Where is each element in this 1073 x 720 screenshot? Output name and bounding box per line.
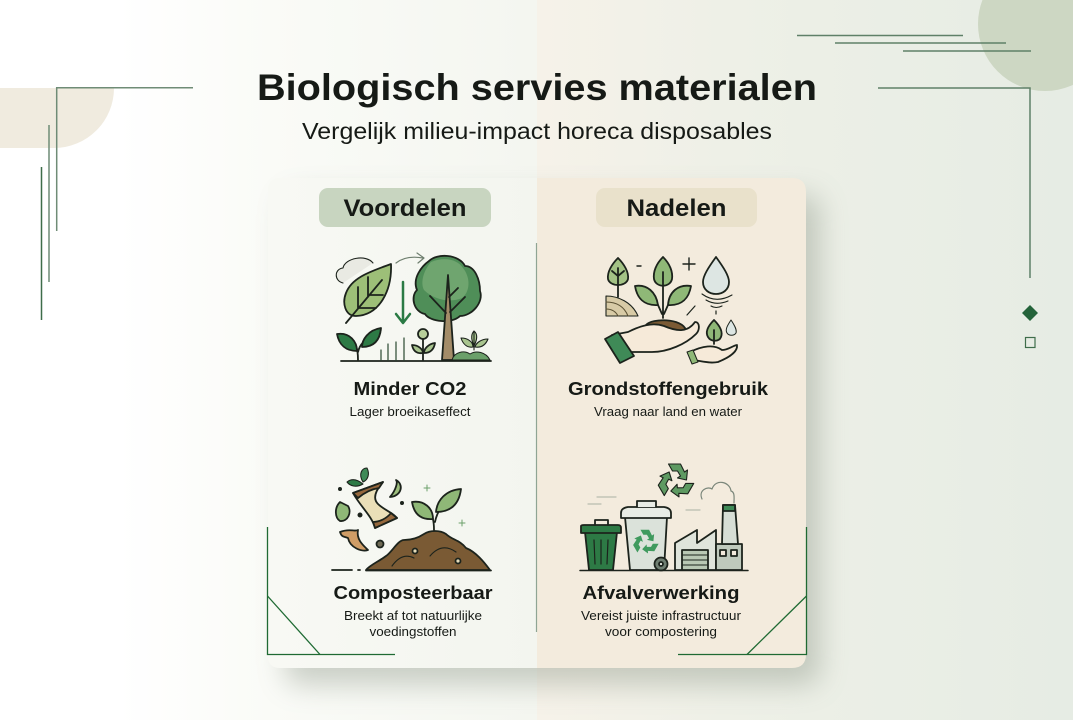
- seedling: [348, 338, 372, 360]
- card corner lines left: [268, 527, 395, 654]
- large hand: [612, 322, 699, 352]
- heap: [366, 531, 490, 570]
- panel: voordelen: [268, 178, 537, 668]
- label: Minder CO2: Lager broeikaseffect: [350, 405, 471, 419]
- small hand: [690, 345, 737, 363]
- panel: nadelen: [537, 178, 806, 668]
- subtitle: Vergelijk milieu-impact horeca disposables: [302, 118, 772, 144]
- icon: bins, recycling and factory: [580, 464, 748, 570]
- central plant: [654, 257, 672, 286]
- label: Grondstoffengebruik: Grondstoffengebruik: [568, 379, 769, 399]
- label: Composteerbaar: Breekt af tot natuurlijke: [344, 609, 482, 623]
- icon: hands, plants and water: [605, 257, 737, 364]
- decorative circle top right: [978, 0, 1073, 91]
- label: Afvalverwerking: Vereist juiste infrastructuur: [581, 609, 741, 623]
- leaf: [344, 264, 391, 316]
- label: Composteerbaar: Composteerbaar: [334, 583, 492, 603]
- card corner lines right: [678, 527, 806, 654]
- corner lines top left: [42, 88, 193, 320]
- faint marks: [588, 497, 700, 510]
- label: Composteerbaar: voedingstoffen: [370, 625, 457, 639]
- label: Minder CO2: Minder CO2: [354, 379, 466, 399]
- center divider: [536, 243, 538, 632]
- wheel: [654, 558, 668, 570]
- label: Afvalverwerking: [581, 583, 741, 639]
- green bin: [585, 532, 617, 570]
- cloud: [701, 482, 734, 503]
- decorative half circle left: [0, 88, 114, 148]
- leaves and scraps: [361, 468, 368, 482]
- ground line: [580, 570, 748, 572]
- soil: [646, 320, 686, 333]
- ground line: [341, 360, 491, 362]
- down arrow: [396, 282, 410, 323]
- label: Grondstoffengebruik: Vraag naar land en water: [594, 405, 742, 419]
- factory: [675, 530, 716, 570]
- water drop: [703, 257, 729, 294]
- cloud: [336, 258, 373, 283]
- diamond marker: [1022, 305, 1038, 321]
- recycling symbol: [655, 464, 694, 500]
- small bars: [381, 338, 404, 360]
- curved arrow: [396, 253, 424, 263]
- heading pill: Nadelen: Nadelen: [626, 195, 726, 222]
- small plant: [422, 337, 424, 360]
- icon: leaf, tree and CO2 arrow: [336, 253, 491, 361]
- heading pill: Nadelen: [596, 188, 757, 227]
- sprout: [428, 500, 448, 530]
- square marker: [1026, 338, 1035, 348]
- soil dots: [376, 540, 384, 548]
- comparison card: [268, 178, 806, 668]
- minus and plus: [637, 258, 695, 270]
- right plant: [461, 331, 488, 350]
- grey bin: [625, 517, 667, 570]
- title: Biologisch servies materialen: [257, 67, 817, 108]
- tree crown: [414, 256, 481, 321]
- tree trunk: [442, 275, 454, 360]
- icon: compost heap with apple core: [332, 468, 491, 570]
- corner lines top right: [797, 36, 1031, 278]
- recycling on bin: [631, 530, 659, 556]
- apple core: [353, 482, 397, 528]
- small sprout: [707, 320, 722, 341]
- heading pill: Voordelen: [319, 188, 491, 227]
- heading pill: Voordelen: Voordelen: [344, 195, 466, 222]
- label: Grondstoffengebruik: [568, 379, 769, 419]
- label: Afvalverwerking: Afvalverwerking: [582, 583, 740, 603]
- label: Minder CO2: [350, 379, 471, 419]
- label: Afvalverwerking: voor compostering: [605, 625, 717, 639]
- small tree: [608, 258, 628, 285]
- hill: [606, 296, 638, 316]
- label: Composteerbaar: [334, 583, 492, 639]
- card shadow: [285, 195, 820, 685]
